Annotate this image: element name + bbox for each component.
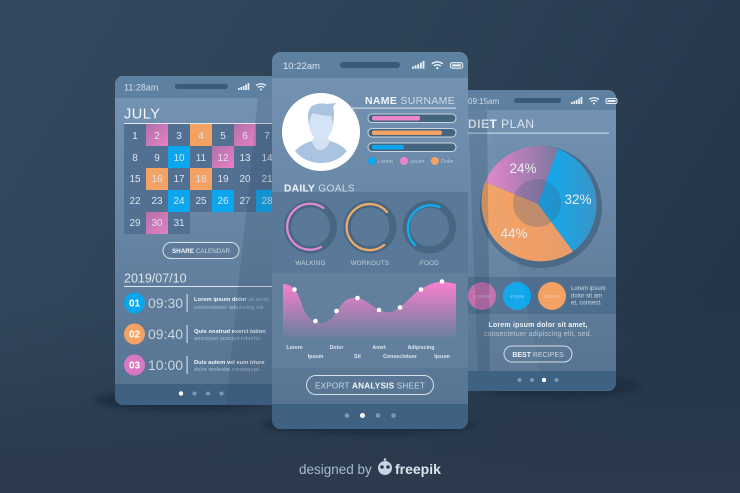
legend band with circles: dolor sit am — [571, 294, 602, 300]
schedule list: 03 — [129, 360, 140, 372]
pie chart: 44% — [500, 226, 528, 241]
header bar left: 11:28am — [124, 82, 158, 92]
panel: right phone diet plan — [450, 90, 617, 391]
footer bar centre — [272, 404, 468, 429]
area chart panel: Lorem — [286, 345, 303, 351]
area chart panel — [272, 273, 468, 368]
progress bars — [368, 114, 456, 152]
calendar grid: 5 — [220, 131, 226, 142]
heading: daily goals: DAILY GOALS — [284, 184, 355, 194]
calendar grid: 9 — [154, 153, 160, 164]
calendar grid: 28 — [261, 196, 273, 207]
calendar grid: 22 — [129, 196, 141, 207]
schedule list: 09:40 — [148, 326, 183, 342]
header bar centre: 10:22am — [283, 61, 320, 72]
schedule list: consectetuer adipiscing elit. — [194, 305, 266, 311]
schedule list: 01 — [129, 298, 140, 310]
legend band with circles: IPSUM — [510, 294, 524, 299]
calendar grid: 21 — [261, 174, 273, 185]
calendar grid: 11 — [196, 153, 207, 164]
footer bar right — [450, 371, 616, 391]
calendar grid: 17 — [173, 174, 185, 185]
calendar grid: 30 — [151, 218, 163, 229]
footer bar left — [115, 384, 290, 405]
button: share calendar — [163, 242, 239, 258]
calendar grid: 13 — [239, 153, 251, 164]
legend band with circles: DOLOR — [544, 294, 561, 299]
calendar grid: 23 — [151, 196, 163, 207]
calendar grid: 1 — [132, 131, 138, 142]
profile name: NAME SURNAME — [365, 95, 455, 107]
calendar grid: 29 — [129, 218, 141, 229]
calendar grid: 2 — [154, 131, 160, 142]
schedule list: Lorem ipsum dolor sit amet, — [194, 297, 270, 303]
button: best recipes: BEST RECIPES — [512, 352, 564, 359]
calendar grid: 20 — [239, 174, 251, 185]
diet text block: consectetuer adipiscing elit, sed. — [484, 331, 592, 338]
button: export analysis sheet — [306, 376, 434, 394]
legend band with circles: LOREM — [474, 294, 490, 299]
bar legend — [368, 157, 454, 165]
area chart panel: Adipiscing — [407, 345, 435, 351]
calendar grid: 25 — [195, 196, 207, 207]
header bar left — [115, 76, 290, 98]
goals panel: WALKING — [295, 260, 326, 267]
diet text block: Lorem ipsum dolor sit amet, — [488, 322, 588, 329]
schedule list: Quis nostrud exerci tation — [194, 329, 266, 335]
area chart panel: Ipsum — [308, 354, 324, 360]
calendar grid: 3 — [176, 131, 182, 142]
credit: designed by freepik: freepik — [395, 461, 441, 477]
calendar grid: 10 — [173, 153, 185, 164]
area chart panel: Ipsum — [434, 354, 450, 360]
button: export analysis sheet: EXPORT ANALYSIS SHEET — [315, 382, 425, 390]
calendar grid: 7 — [264, 131, 270, 142]
icon: freepik mascot — [378, 458, 392, 475]
avatar — [282, 93, 360, 171]
button: share calendar: SHARE CALENDAR — [172, 248, 230, 255]
schedule list: dolor molestie consequat. — [194, 367, 260, 373]
schedule list: 02 — [129, 330, 140, 340]
area chart panel: Consectetuer — [383, 354, 417, 360]
calendar grid: 15 — [129, 174, 141, 185]
calendar grid — [124, 124, 274, 234]
header bar centre — [272, 52, 468, 78]
goals panel: WORKOUTS — [351, 260, 389, 267]
credit: designed by freepik: designed by — [299, 462, 372, 477]
header bar right — [450, 90, 617, 110]
pie chart: 32% — [564, 192, 592, 207]
pie chart — [480, 146, 602, 268]
legend band with circles — [450, 277, 616, 314]
goals panel: FOOD — [420, 260, 439, 267]
calendar grid: 14 — [261, 153, 273, 164]
legend band with circles: et, consect. — [571, 300, 602, 306]
legend band with circles: Lorem ipsum — [571, 286, 606, 292]
calendar grid: 4 — [198, 131, 204, 142]
calendar grid: 16 — [151, 174, 163, 185]
heading: July: JULY — [124, 106, 160, 122]
header bar right: 09:15am — [468, 97, 499, 106]
phone shadows — [95, 374, 642, 435]
calendar grid: 12 — [217, 153, 229, 164]
calendar grid: 18 — [195, 174, 207, 185]
schedule list: amcorper suscipit lobortis. — [194, 336, 262, 342]
button: best recipes — [504, 346, 572, 362]
pie chart: 24% — [509, 161, 537, 176]
calendar grid: 26 — [217, 196, 229, 207]
bar legend: Dolor — [441, 159, 454, 165]
goals panel — [272, 192, 468, 273]
calendar grid: 27 — [239, 196, 251, 207]
calendar grid: 24 — [173, 196, 185, 207]
schedule list — [124, 292, 270, 376]
schedule list: 10:00 — [148, 357, 183, 373]
panel: centre phone — [272, 52, 468, 429]
heading: diet plan: DIET PLAN — [468, 117, 535, 131]
credit: designed by freepik — [299, 458, 441, 477]
bar legend: Ipsum — [410, 159, 425, 165]
calendar grid: 31 — [173, 218, 185, 229]
area chart panel: Dolor — [330, 345, 343, 351]
date heading: 2019/07/10 — [124, 272, 187, 286]
area chart panel: Amet — [372, 345, 386, 351]
panel: left phone calendar — [115, 76, 290, 405]
calendar grid: 6 — [242, 131, 248, 142]
area chart panel: Sit — [354, 354, 361, 360]
schedule list: 09:30 — [148, 295, 183, 311]
bar legend: Lorem — [378, 159, 394, 165]
diet text block — [484, 322, 592, 338]
calendar grid: 8 — [132, 153, 138, 164]
schedule list: Duis autem vel eum iriure — [194, 360, 265, 366]
calendar grid: 19 — [217, 174, 229, 185]
